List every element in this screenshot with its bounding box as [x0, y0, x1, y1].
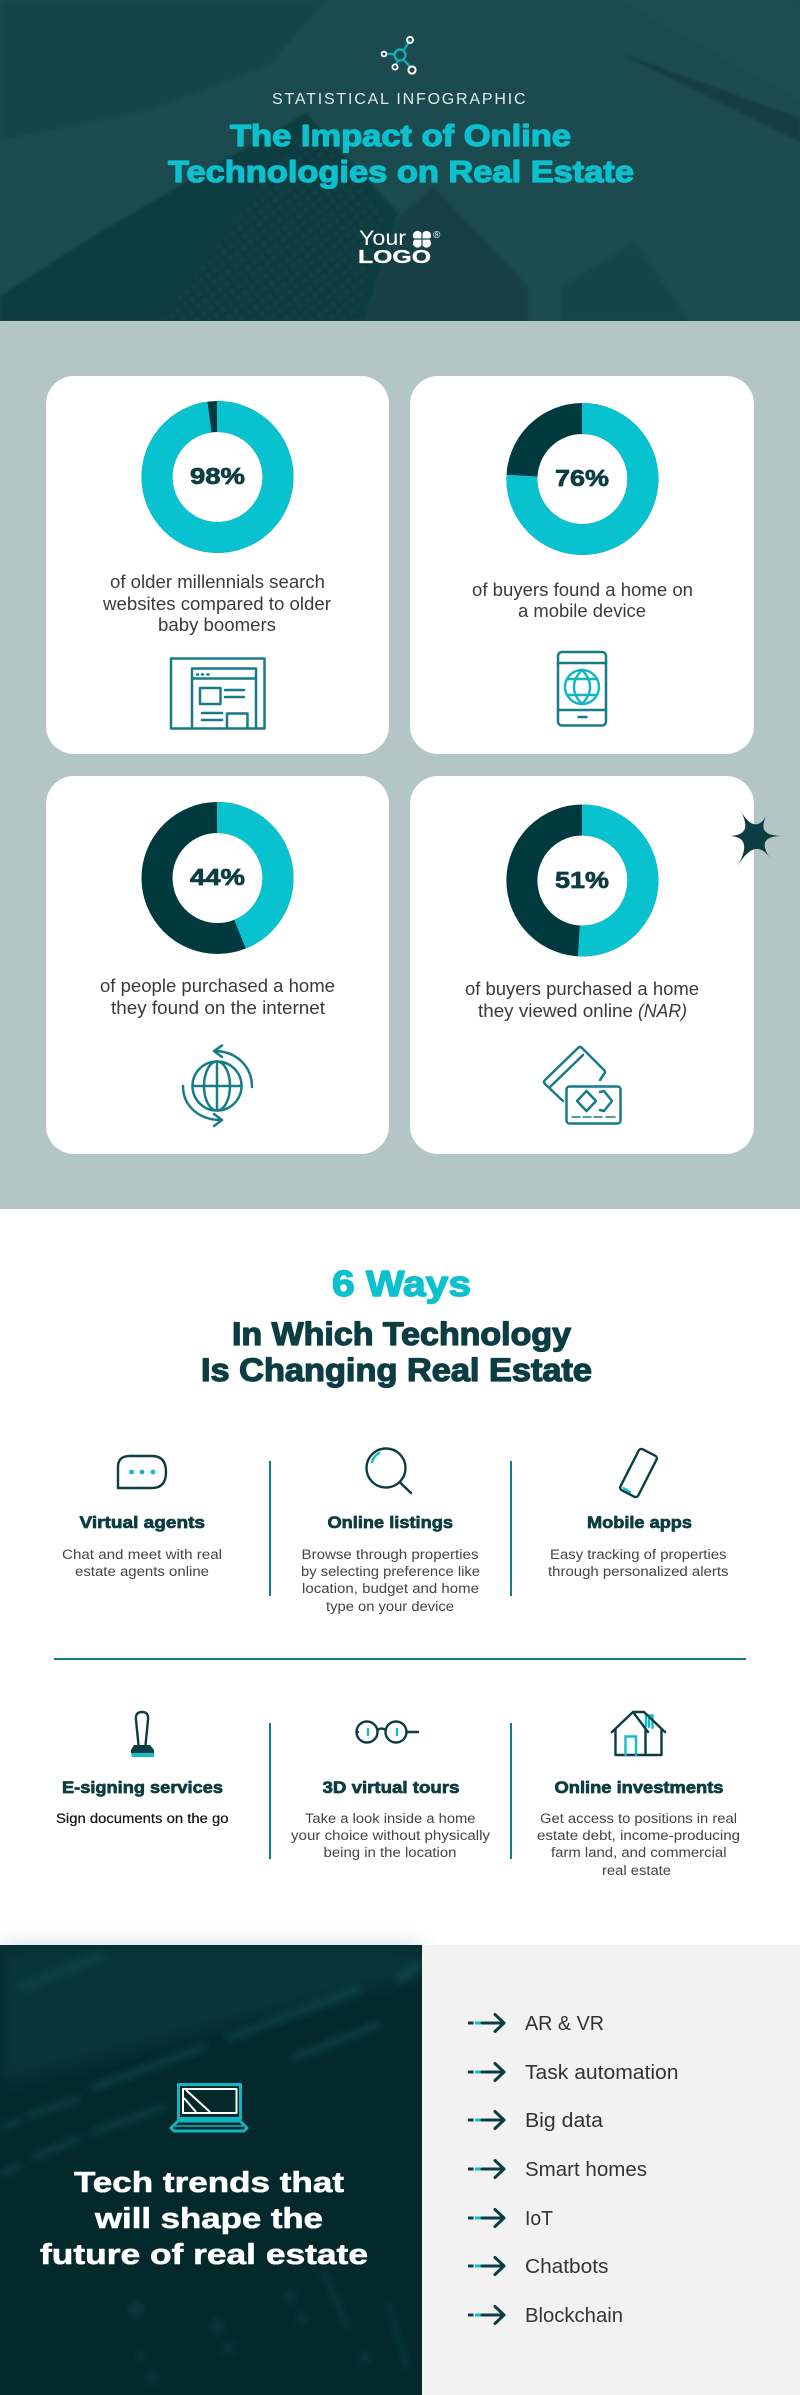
way text: your choice without physically: [291, 1828, 490, 1843]
header banner: [0, 0, 800, 321]
way text: Get access to positions in real: [540, 1811, 737, 1826]
ways: online investments: [537, 1712, 740, 1878]
way text: being in the location: [324, 1845, 456, 1860]
way heading: E-signing services: [62, 1779, 223, 1797]
card text: [100, 976, 335, 1018]
icon: house: [612, 1712, 665, 1755]
way heading: 3D virtual tours: [322, 1779, 460, 1797]
trends title: will shape the: [94, 2203, 323, 2235]
panel: tech trends title: [0, 1945, 422, 2395]
icon: credit cards: [544, 1047, 620, 1124]
card text: websites compared to older: [102, 594, 331, 614]
list item: Task automation: [468, 2062, 678, 2084]
way text: location, budget and home: [302, 1581, 479, 1596]
list item: Smart homes: [468, 2159, 647, 2181]
way text: Take a look inside a home: [305, 1811, 476, 1826]
panel: 51 percent card: [410, 776, 754, 1154]
title: [168, 118, 634, 189]
icon: phone with globe: [558, 652, 606, 726]
section heading: 6 Ways: [332, 1263, 471, 1304]
logo: ®: [433, 230, 441, 241]
section heading: [201, 1263, 592, 1388]
way heading: Online investments: [554, 1779, 724, 1797]
list item: AR & VR: AR & VR: [525, 2013, 604, 2035]
list item: IoT: IoT: [525, 2208, 553, 2230]
ways: e-signing services: [56, 1712, 229, 1826]
icon: tilted phone: [619, 1448, 658, 1498]
list item: Task automation: Task automation: [525, 2062, 678, 2084]
list item: Blockchain: [468, 2305, 623, 2327]
panel: 44 percent card: [46, 776, 389, 1154]
ways: virtual agents: [62, 1456, 222, 1579]
trends title: Tech trends that: [74, 2167, 344, 2199]
title: The Impact of Online: [230, 118, 571, 153]
ways: mobile apps: [548, 1448, 729, 1579]
card text: [465, 979, 699, 1021]
way text: Easy tracking of properties: [550, 1547, 727, 1562]
list item: Blockchain: Blockchain: [525, 2305, 623, 2327]
icon: rotating globe: [183, 1046, 252, 1126]
percent label: 76%: [555, 465, 609, 491]
logo: [358, 227, 441, 267]
way heading: Virtual agents: [80, 1514, 205, 1532]
way heading: Mobile apps: [587, 1514, 692, 1532]
card text: baby boomers: [158, 615, 276, 635]
way text: [62, 1547, 222, 1579]
panel: 76 percent card: [410, 376, 754, 754]
way text: estate debt, income-producing: [537, 1828, 740, 1843]
card text: [472, 580, 693, 621]
percent label: 98%: [190, 463, 245, 489]
card text: (NAR): [638, 1001, 687, 1021]
donut chart: 44%: [157, 818, 278, 938]
section heading: Is Changing Real Estate: [201, 1352, 592, 1388]
section heading: In Which Technology: [232, 1316, 571, 1352]
icon: laptop: [171, 2084, 247, 2131]
title: Technologies on Real Estate: [168, 154, 634, 189]
list item: Chatbots: [468, 2256, 608, 2278]
icon: glasses: [356, 1722, 418, 1742]
logo: LOGO: [358, 247, 431, 267]
panel: 98 percent card: [46, 376, 389, 754]
list item: Big data: Big data: [525, 2110, 604, 2132]
card text: of buyers found a home on: [472, 580, 693, 600]
trends title: [40, 2167, 368, 2271]
way text: estate agents online: [75, 1564, 209, 1579]
way text: Chat and meet with real: [62, 1547, 222, 1562]
way text: [301, 1547, 480, 1614]
logo: Your: [359, 227, 406, 250]
list item: Chatbots: Chatbots: [525, 2256, 608, 2278]
icon: molecule: [382, 37, 416, 74]
icon: sparkle star: [728, 810, 782, 867]
way text: [537, 1811, 740, 1878]
way text: through personalized alerts: [548, 1564, 729, 1579]
card text: of buyers purchased a home: [465, 979, 699, 999]
icon: browser window: [171, 658, 264, 728]
percent label: 51%: [555, 867, 609, 893]
list item: Big data: [468, 2110, 604, 2132]
card text: of older millennials search: [110, 572, 325, 592]
list item: Smart homes: Smart homes: [525, 2159, 647, 2181]
way text: [548, 1547, 729, 1579]
way text: [291, 1811, 490, 1860]
way text: by selecting preference like: [301, 1564, 480, 1579]
way text: real estate: [602, 1863, 671, 1878]
donut chart: 98%: [157, 416, 278, 538]
way text: Browse through properties: [302, 1547, 479, 1562]
icon: stamp: [131, 1712, 154, 1757]
way text: type on your device: [326, 1599, 454, 1614]
list item: AR & VR: [468, 2013, 604, 2035]
icon: chat bubble: [118, 1456, 166, 1488]
way text: farm land, and commercial: [551, 1845, 726, 1860]
donut chart: 51%: [522, 820, 643, 941]
card text: of people purchased a home: [100, 976, 335, 996]
icon: magnifier: [366, 1448, 411, 1493]
trends title: future of real estate: [40, 2239, 368, 2271]
list item: IoT: [468, 2208, 553, 2230]
card text: they found on the internet: [111, 998, 325, 1018]
stats section background: [0, 321, 800, 1209]
ways: 3d virtual tours: [291, 1722, 490, 1860]
ways: online listings: [301, 1448, 480, 1614]
card text: they viewed online: [478, 1001, 633, 1021]
percent label: 44%: [190, 864, 245, 890]
subtitle: STATISTICAL INFOGRAPHIC: [272, 91, 526, 108]
way heading: Online listings: [328, 1514, 453, 1532]
panel: trends list: [422, 1945, 800, 2395]
card text: a mobile device: [518, 601, 646, 621]
donut chart: 76%: [522, 418, 643, 540]
card text: [102, 572, 331, 635]
way text: Sign documents on the go: [56, 1811, 229, 1826]
